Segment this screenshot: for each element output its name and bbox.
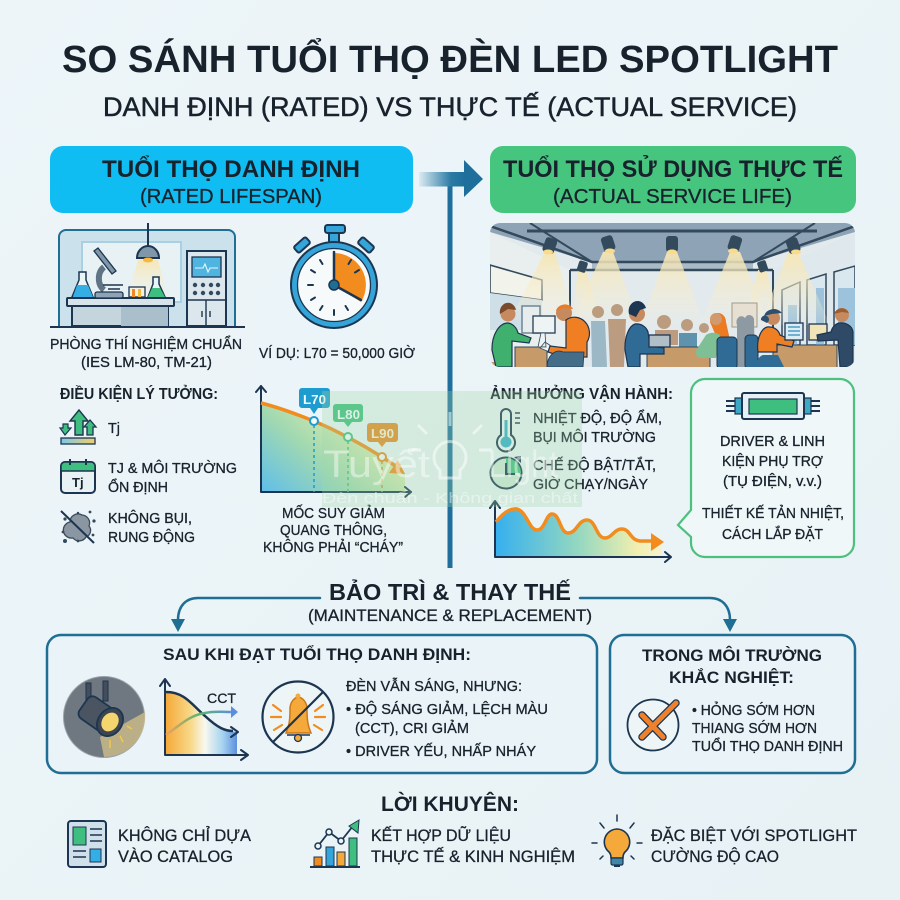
chart: lumen depreciation milestones: [256, 386, 411, 497]
panel: after reaching rated life: • DRIVER YẾU, NHẤP NHÁY: [346, 743, 536, 760]
icon: standard laboratory: [50, 223, 245, 327]
title: SO SÁNH TUỔI THỌ ĐÈN LED SPOTLIGHT: [62, 36, 838, 81]
watermark: [322, 391, 582, 507]
panel: harsh environments: • HỎNG SỚM HƠN: [692, 701, 815, 719]
influence: temperature, humidity, dust: [497, 409, 662, 451]
panel: after reaching rated life: SAU KHI ĐẠT TUỔI THỌ DANH ĐỊNH:: [163, 645, 471, 664]
icon: failure cross: [628, 700, 678, 750]
panel: after reaching rated life: [47, 635, 597, 773]
subtitle: DANH ĐỊNH (RATED) VS THỰC TẾ (ACTUAL SERVICE): [103, 91, 797, 122]
heading: maintenance and replacement: (MAINTENANCE & REPLACEMENT): [308, 606, 592, 625]
panel header: actual service life: (ACTUAL SERVICE LIFE): [553, 186, 792, 208]
influence: on/off cycles, daily hours: CHẾ ĐỘ BẬT/TẮT,: [533, 456, 656, 474]
advice: especially for high-intensity spotlight: [592, 815, 857, 866]
panel header: actual service life: TUỔI THỌ SỬ DỤNG THỰC TẾ: [503, 154, 843, 183]
chart: real-world fluctuating degradation: [490, 501, 671, 562]
illustration: office under spotlights: [490, 223, 855, 369]
heading: maintenance and replacement: BẢO TRÌ & THAY THẾ: [329, 577, 571, 605]
advice: especially for high-intensity spotlight: ĐẶC BIỆT VỚI SPOTLIGHT: [651, 826, 857, 845]
panel header: actual service life: [490, 146, 856, 213]
chart: lumen depreciation milestones: L80: [337, 407, 360, 422]
ideal condition: Tj: Tj: [108, 420, 120, 437]
panel: harsh environments: TUỔI THỌ DANH ĐỊNH: [692, 737, 843, 755]
panel: harsh environments: TRONG MÔI TRƯỜNG: [642, 646, 822, 665]
panel header: rated lifespan: [50, 146, 413, 213]
callout: driver and accessories: DRIVER & LINH: [720, 433, 825, 450]
ideal condition: no dust, no vibration: KHÔNG BỤI,: [108, 510, 192, 527]
heading: advice: LỜI KHUYÊN:: [381, 792, 519, 816]
panel header: rated lifespan: (RATED LIFESPAN): [140, 186, 322, 208]
chart: brightness and CCT shift: [160, 679, 248, 760]
advice: do not rely only on catalog: VÀO CATALOG: [118, 847, 233, 866]
panel: harsh environments: [610, 635, 855, 773]
advice: combine real data and experience: KẾT HỢP DỮ LIỆU: [371, 826, 511, 845]
chart: lumen depreciation milestones: L70: [303, 392, 326, 407]
advice: combine real data and experience: [310, 820, 575, 867]
example text: VÍ DỤ: L70 = 50,000 GIỜ: [259, 345, 415, 362]
icon: no flicker alarm bell: [262, 682, 334, 752]
arrow: rated to actual with vertical divider: [419, 160, 483, 568]
lab caption: [50, 335, 242, 371]
heading: maintenance and replacement: [308, 577, 592, 625]
callout: driver and accessories: KIỆN PHỤ TRỢ: [722, 453, 823, 470]
lab caption: PHÒNG THÍ NGHIỆM CHUẨN: [50, 335, 242, 353]
desks: [515, 345, 837, 369]
advice: do not rely only on catalog: KHÔNG CHỈ DỰA: [118, 826, 252, 845]
advice: do not rely only on catalog: [68, 821, 252, 867]
chart caption: KHÔNG PHẢI “CHÁY”: [263, 539, 403, 556]
chart caption: QUANG THÔNG,: [280, 522, 387, 539]
arrow: to right maintenance panel: [580, 598, 737, 632]
watermark: Đèn chuẩn - Không gian chất: [322, 490, 579, 507]
heading: operating influences: ẢNH HƯỞNG VẬN HÀNH:: [490, 385, 673, 403]
chart caption: MỐC SUY GIẢM: [282, 504, 385, 522]
ideal condition: no dust, no vibration: [61, 510, 195, 546]
callout: driver and accessories: CÁCH LẮP ĐẶT: [722, 525, 823, 543]
chart: lumen depreciation milestones: L90: [371, 426, 394, 441]
panel header: rated lifespan: TUỔI THỌ DANH ĐỊNH: [102, 155, 360, 183]
panel: harsh environments: THIANG SỚM HƠN: [692, 720, 817, 737]
ideal condition: stable Tj and environment: [61, 459, 237, 496]
icon: stopwatch: [291, 225, 377, 328]
panel: after reaching rated life: ĐÈN VẪN SÁNG, NHƯNG:: [346, 678, 522, 695]
influence: temperature, humidity, dust: BỤI MÔI TRƯỜNG: [533, 429, 656, 446]
chart caption: [263, 504, 403, 556]
arrow: to left maintenance panel: [171, 598, 320, 632]
panel: harsh environments: KHẮC NGHIỆT:: [669, 668, 794, 687]
influence: on/off cycles, daily hours: GIỜ CHẠY/NGÀY: [533, 476, 648, 493]
influence: temperature, humidity, dust: NHIỆT ĐỘ, ĐỘ ẨM,: [533, 409, 662, 427]
ideal condition: stable Tj and environment: Tj: [72, 475, 84, 490]
watermark: Tuyết: [323, 444, 430, 486]
icon: aging spotlight: [64, 676, 145, 758]
ideal condition: no dust, no vibration: RUNG ĐỘNG: [108, 529, 195, 546]
lab caption: (IES LM-80, TM-21): [81, 354, 212, 371]
callout: driver and accessories: [678, 379, 854, 557]
ideal condition: stable Tj and environment: TJ & MÔI TRƯỜNG: [108, 460, 237, 477]
chart: brightness and CCT shift: CCT: [207, 691, 236, 706]
callout: driver and accessories: THIẾT KẾ TẢN NHIỆT,: [702, 505, 844, 522]
watermark: Light: [488, 444, 558, 486]
panel: after reaching rated life: • ĐỘ SÁNG GIẢM, LỆCH MÀU: [346, 701, 548, 718]
heading: ideal conditions: ĐIỀU KIỆN LÝ TƯỞNG:: [60, 385, 218, 403]
ideal condition: stable Tj and environment: ỔN ĐỊNH: [108, 478, 168, 496]
icon: LED driver: [726, 393, 820, 419]
callout: driver and accessories: (TỤ ĐIỆN, v.v.): [723, 473, 822, 490]
panel: after reaching rated life: (CCT), CRI GIẢM: [355, 720, 469, 737]
influence: on/off cycles, daily hours: [490, 456, 656, 493]
advice: combine real data and experience: THỰC TẾ & KINH NGHIỆM: [371, 847, 575, 866]
advice: especially for high-intensity spotlight: CƯỜNG ĐỘ CAO: [651, 847, 779, 866]
ideal condition: Tj: [60, 410, 120, 444]
